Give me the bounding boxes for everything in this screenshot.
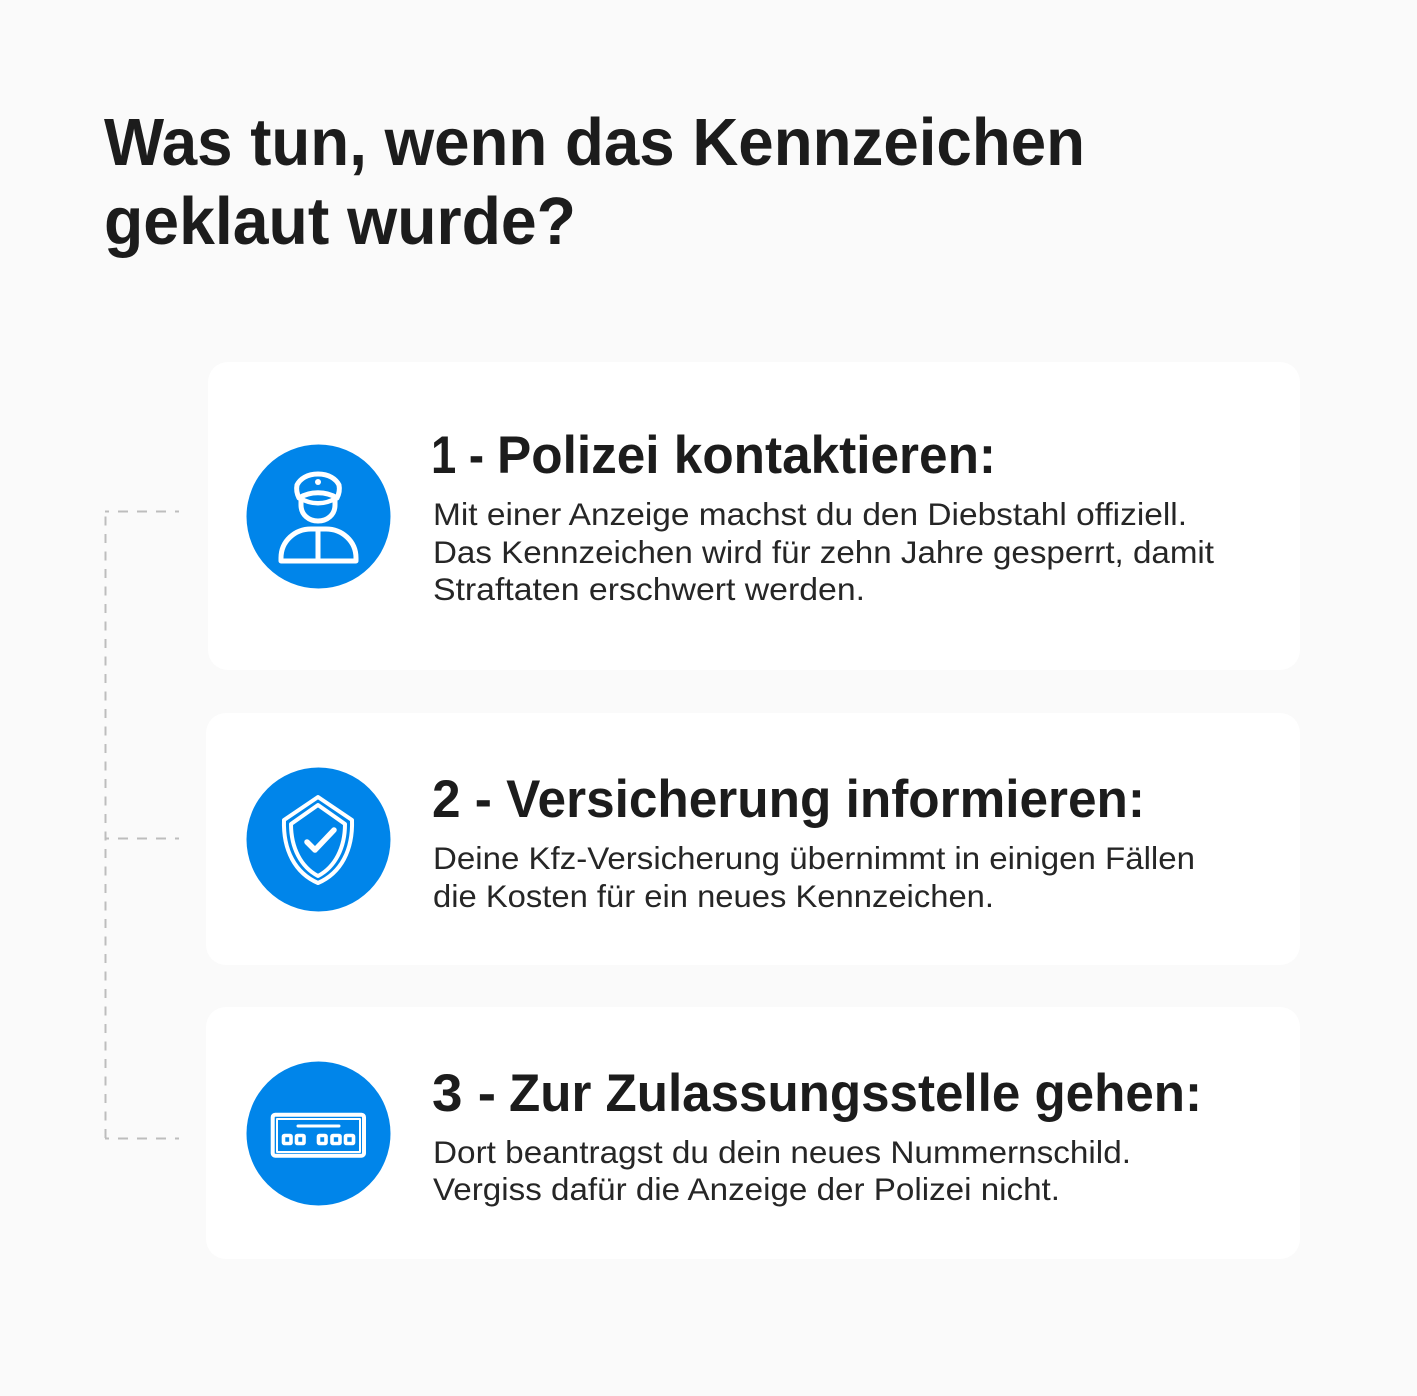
heading: step 1: Polizei kontaktieren: (497, 426, 996, 485)
icon: licence plate (246, 1062, 390, 1206)
text: step 1 description: Straftaten erschwert werden. (433, 571, 865, 607)
title: Was tun, wenn das Kennzeichen (104, 105, 1085, 180)
panel: step 3 registration office (206, 1007, 1300, 1259)
title: geklaut wurde? (104, 184, 576, 259)
text: step 1 description (433, 496, 1214, 607)
text: step 2 description (433, 840, 1195, 914)
heading: step 1: 1 - (431, 426, 484, 485)
dashed connector timeline (105, 511, 179, 1138)
text: step 1 description: Mit einer Anzeige machst du den Diebstahl offiziell. (433, 496, 1187, 532)
text: step 2 description: Deine Kfz-Versicherung übernimmt in einigen Fällen (433, 840, 1195, 876)
icon: police officer (246, 444, 390, 588)
heading: step 3: 3 - (432, 1064, 496, 1123)
panel: step 1 police (208, 362, 1300, 670)
text: step 2 description: die Kosten für ein neues Kennzeichen. (433, 878, 994, 914)
panel: step 2 insurance (206, 713, 1300, 965)
heading: step 3: Zur Zulassungsstelle gehen: (509, 1064, 1202, 1123)
text: step 3 description: Vergiss dafür die Anzeige der Polizei nicht. (433, 1171, 1060, 1207)
heading: step 2: 2 - Versicherung informieren: (432, 770, 1145, 829)
icon: shield with check (246, 768, 390, 912)
text: step 3 description: Dort beantragst du dein neues Nummernschild. (433, 1134, 1131, 1170)
text: step 1 description: Das Kennzeichen wird für zehn Jahre gesperrt, damit (433, 534, 1214, 570)
title (104, 105, 1085, 259)
text: step 3 description (433, 1134, 1131, 1207)
